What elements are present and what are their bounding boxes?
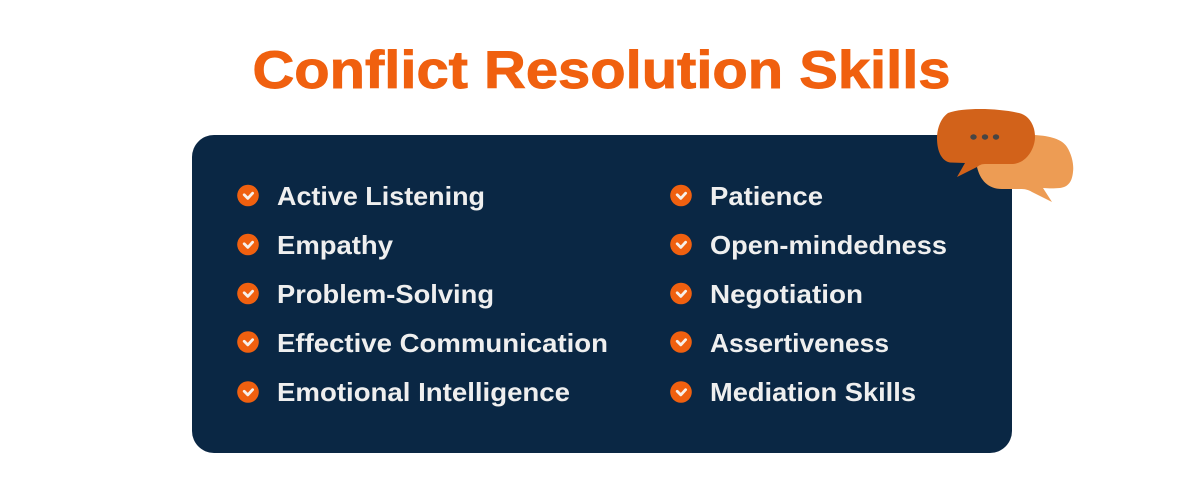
skill: Problem-Solving: Problem-Solving	[277, 279, 494, 309]
light speech bubble	[977, 135, 1073, 202]
skill: Mediation Skills: Mediation Skills	[710, 377, 916, 407]
typing dots	[970, 134, 999, 140]
skill: Open-mindedness: Open-mindedness	[710, 230, 947, 260]
icon: speech bubbles	[937, 109, 1073, 202]
skill: Emotional Intelligence: Emotional Intelligence	[277, 377, 570, 407]
dark speech bubble	[937, 109, 1035, 177]
skill: Assertiveness: Assertiveness	[710, 328, 889, 358]
skill: Empathy: Empathy	[277, 230, 394, 260]
title: Conflict Resolution Skills	[252, 41, 950, 100]
skill: Patience	[670, 181, 823, 211]
left column skills	[237, 181, 608, 407]
panel: skills list background	[192, 135, 1012, 453]
skill: Patience: Patience	[710, 181, 823, 211]
skill: Effective Communication: Effective Communication	[277, 328, 608, 358]
skill: Negotiation: Negotiation	[710, 279, 863, 309]
skill: Active Listening: Active Listening	[277, 181, 485, 211]
right column skills	[670, 181, 947, 407]
